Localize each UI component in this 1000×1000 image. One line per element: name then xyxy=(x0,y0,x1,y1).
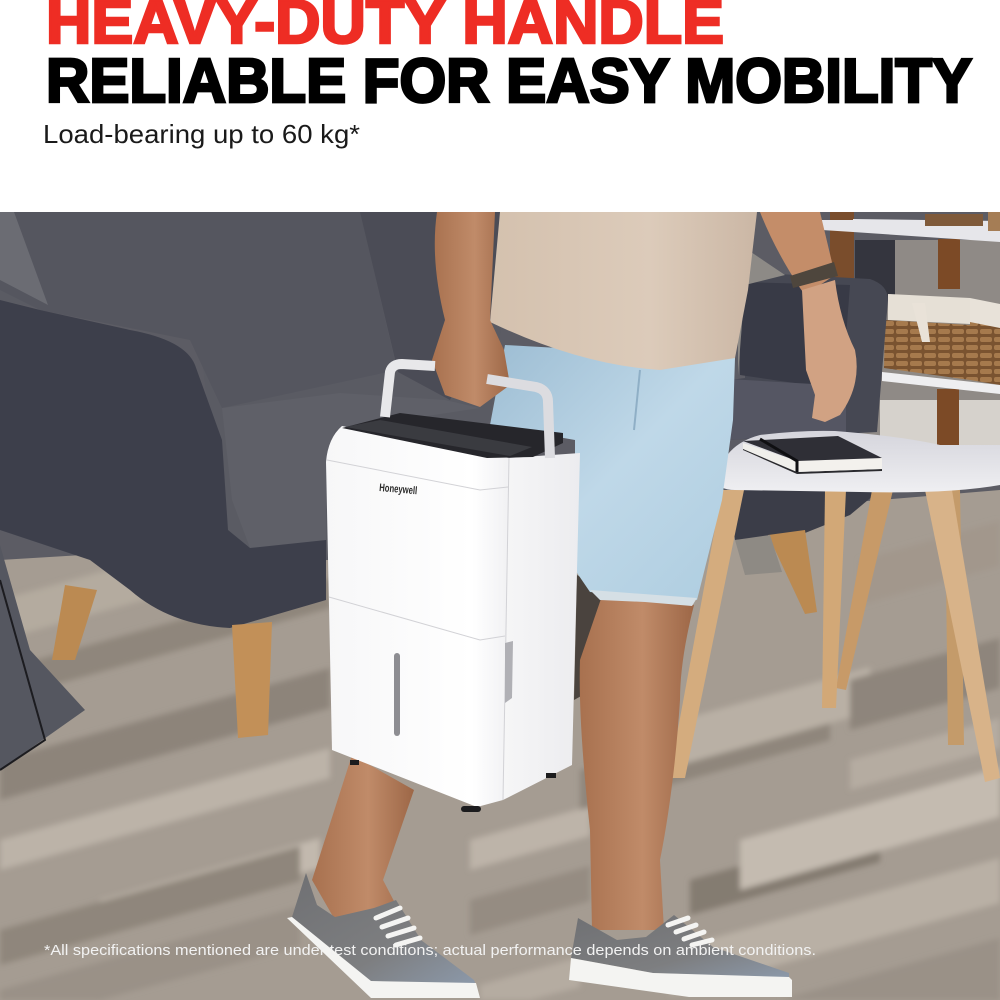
wooden floor xyxy=(0,490,1000,1000)
denim shorts xyxy=(490,345,735,606)
subtitle: load bearing: Load-bearing up to 60 kg* xyxy=(43,119,360,149)
table top xyxy=(718,431,1000,492)
front shoe xyxy=(569,915,792,997)
side grip xyxy=(505,641,513,703)
left arm and hand xyxy=(432,212,510,407)
right armchair xyxy=(728,250,888,614)
person xyxy=(287,212,857,998)
side panel xyxy=(503,453,580,800)
rear leg xyxy=(312,755,414,920)
water level window xyxy=(394,653,400,736)
footnote: *All specifications mentioned are under test conditions; actual performance depends on ambient conditions. xyxy=(44,942,816,959)
seam lines xyxy=(327,458,509,800)
front leg xyxy=(580,590,694,930)
notebook xyxy=(743,436,882,474)
coffee table xyxy=(669,431,1000,782)
front panel xyxy=(326,426,509,807)
wrist watch xyxy=(790,262,838,288)
room wall background xyxy=(0,212,1000,612)
shadow behind front leg xyxy=(574,575,602,700)
t-shirt xyxy=(490,212,757,370)
wicker baskets xyxy=(884,294,1000,385)
knitted throw blanket xyxy=(738,250,785,375)
table legs xyxy=(669,490,1000,782)
dehumidifier xyxy=(326,364,580,812)
title: black heading: RELIABLE FOR EASY MOBILITY xyxy=(46,47,972,116)
photo: living room scene xyxy=(0,212,1000,1000)
brand logo: Honeywell xyxy=(379,482,418,497)
shelving unit xyxy=(822,212,1000,450)
bag on floor xyxy=(0,545,85,770)
top control panel xyxy=(342,413,563,458)
rear shoe xyxy=(287,873,480,998)
carry handle xyxy=(385,364,550,458)
right arm and hand xyxy=(760,212,835,295)
left armchair xyxy=(0,212,515,738)
wheels xyxy=(350,760,556,812)
